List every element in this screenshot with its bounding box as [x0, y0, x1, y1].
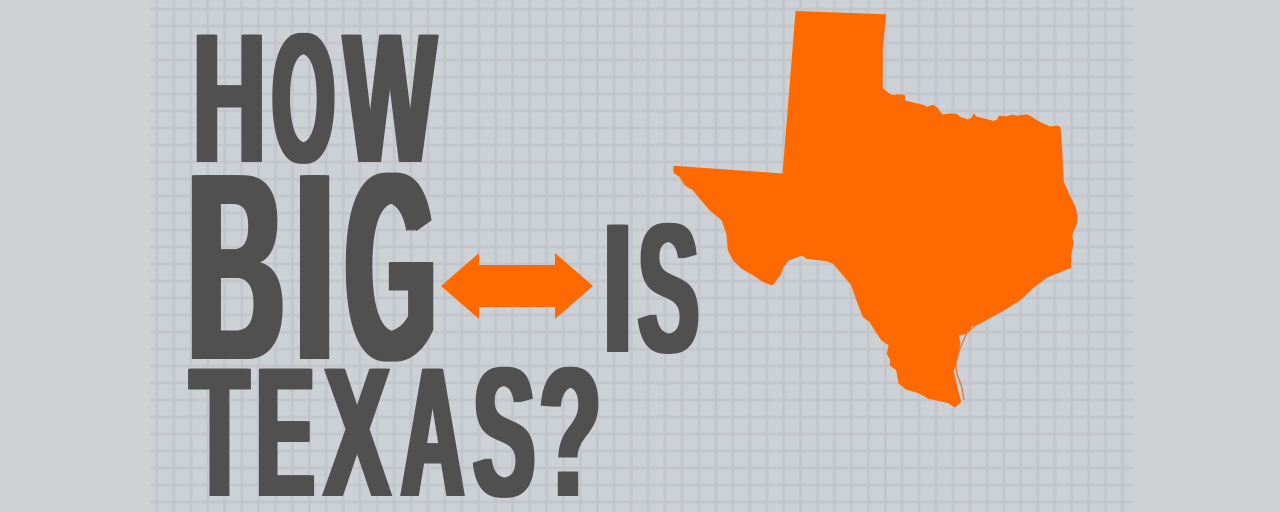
heading word: BIG: G: [346, 117, 436, 416]
barrier island: [956, 325, 976, 400]
arrow: double-headed orange arrow: [441, 253, 593, 319]
heading word: IS: I: [603, 186, 632, 392]
heading word: HOW: H: [193, 0, 265, 202]
heading word: HOW: O: [272, 0, 334, 202]
heading word: HOW: W: [344, 0, 435, 202]
heading word: IS: S: [638, 186, 699, 392]
heading word: TEXAS?: [188, 330, 601, 512]
heading word: HOW: [193, 0, 439, 202]
heading word: BIG: [188, 117, 436, 416]
heading word: IS: [603, 186, 699, 392]
heading word: BIG: I: [296, 117, 333, 416]
heading word: BIG: B: [188, 117, 284, 416]
title: [188, 0, 699, 512]
map: Texas silhouette: [674, 12, 1077, 407]
Texas state shape: [674, 12, 1077, 407]
